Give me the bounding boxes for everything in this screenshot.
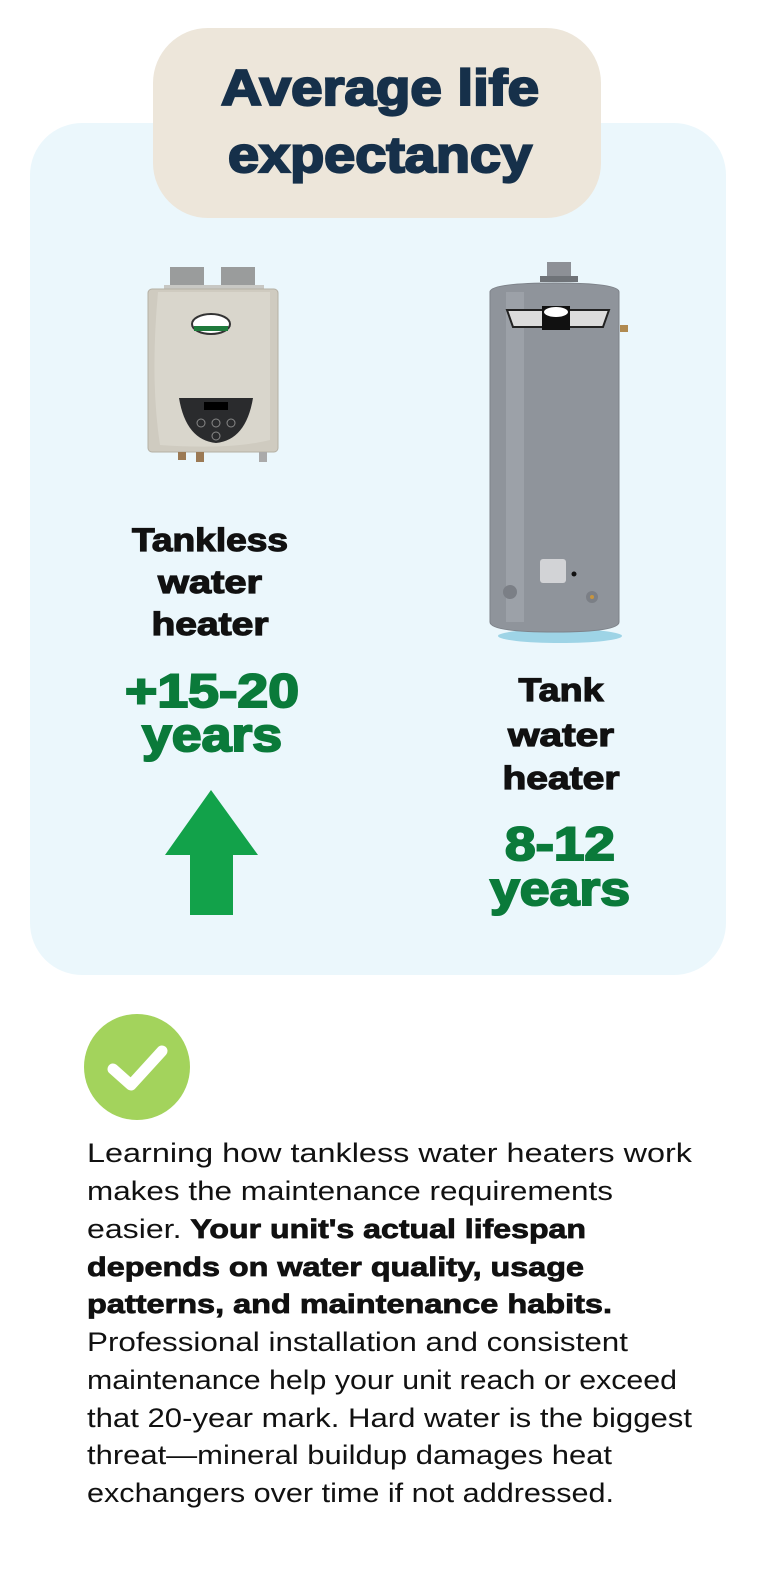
text block: explanation: makes the maintenance requirements xyxy=(87,1176,613,1206)
title pill: expectancy xyxy=(228,127,532,183)
text: tank label: water xyxy=(507,717,614,753)
text: tank label: heater xyxy=(502,760,620,796)
panel: life expectancy background xyxy=(30,123,726,975)
text: tankless label: heater xyxy=(152,606,268,642)
text: tankless label: water xyxy=(157,564,262,600)
text block: explanation: that 20-year mark. Hard water is the biggest xyxy=(87,1403,693,1433)
text block: explanation: Learning how tankless water heaters work xyxy=(87,1138,693,1168)
text block: explanation: depends on water quality, usage xyxy=(87,1252,584,1282)
text: tank label: 8-12 xyxy=(505,817,615,870)
text: tankless label: +15-20 xyxy=(125,664,299,717)
text: tankless label xyxy=(125,522,299,761)
icon: check circle xyxy=(84,1014,190,1120)
text block: explanation: threat—mineral buildup damages heat xyxy=(87,1440,613,1470)
text block: explanation xyxy=(87,1138,693,1508)
icon: tankless water heater xyxy=(148,267,278,462)
text block: explanation: Professional installation and consistent xyxy=(87,1327,629,1357)
icon: tank water heater xyxy=(490,262,628,643)
text block: explanation: maintenance help your unit reach or exceed xyxy=(87,1365,677,1395)
text: tankless label: Tankless xyxy=(132,522,288,558)
text: tank label: years xyxy=(490,862,630,915)
text block: explanation: exchangers over time if not addressed. xyxy=(87,1478,614,1508)
title pill xyxy=(153,28,601,218)
title pill: Average life xyxy=(221,60,539,116)
text: tank label xyxy=(490,672,630,915)
text block: explanation: patterns, and maintenance habits. xyxy=(87,1289,612,1319)
text block: explanation: easier. Your unit's actual lifespan xyxy=(87,1214,586,1244)
text: tank label: Tank xyxy=(518,672,604,708)
text: tankless label: years xyxy=(142,708,282,761)
icon: green up arrow xyxy=(165,790,258,915)
